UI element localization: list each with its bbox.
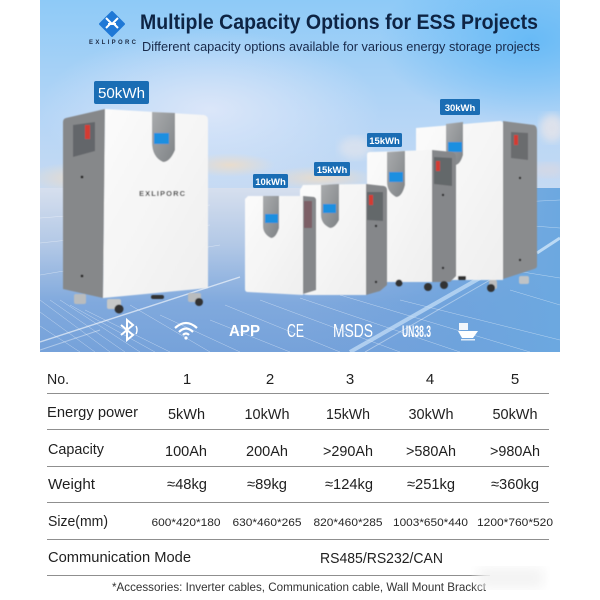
row: Weight: ≈48kg	[167, 476, 207, 493]
label: 30kWh	[440, 99, 480, 115]
row: Communication Mode	[48, 549, 443, 567]
table rules	[47, 394, 549, 576]
battery: 15kWh tall unit	[367, 150, 456, 291]
title: Multiple Capacity Options for ESS Projects	[140, 11, 538, 34]
row: Capacity: 100Ah	[165, 443, 207, 460]
row: Energy power: Energy power	[47, 404, 138, 421]
label: 15kWh wall: 15kWh	[317, 165, 348, 176]
icon: wifi	[175, 323, 197, 340]
label: 15kWh tall	[367, 133, 402, 147]
background: sky and solar panels	[25, 0, 600, 352]
row: Capacity: >580Ah	[406, 443, 456, 460]
row: Weight: ≈89kg	[247, 476, 287, 493]
row: Communication Mode: RS485/RS232/CAN	[320, 550, 443, 567]
subtitle: Different capacity options available for various energy storage projects	[142, 39, 540, 54]
row: Weight: ≈251kg	[407, 476, 455, 493]
row: Weight: ≈124kg	[325, 476, 373, 493]
label: 30kWh: 30kWh	[445, 103, 476, 114]
row: Size(mm)	[48, 513, 553, 530]
row: Weight	[48, 476, 539, 493]
icon: MSDS: MSDS	[333, 321, 373, 341]
table	[47, 371, 553, 576]
row: Weight: ≈360kg	[491, 476, 539, 493]
watermark smudge	[478, 568, 543, 588]
row: No.: 1	[183, 371, 191, 388]
icon: APP: APP	[229, 323, 260, 340]
row: Capacity	[48, 441, 540, 460]
accessories note: *Accessories: Inverter cables, Communication cable, Wall Mount Brackct	[112, 580, 487, 594]
icon: IMDG ship	[458, 323, 478, 340]
row: Energy power: 30kWh	[408, 406, 454, 423]
row: Communication Mode: Communication Mode	[48, 549, 191, 566]
row: Capacity: >290Ah	[323, 443, 373, 460]
row: No.: No.	[47, 371, 69, 388]
label: 10kWh: 10kWh	[255, 177, 286, 188]
row: Energy power: 5kWh	[168, 406, 205, 423]
row: Size(mm): Size(mm)	[48, 513, 108, 530]
row: Size(mm): 630*460*265	[232, 517, 302, 529]
label: 15kWh wall	[314, 162, 350, 176]
row: Size(mm): 820*460*285	[314, 517, 382, 529]
row: Energy power: 10kWh	[244, 406, 290, 423]
row: No.: 3	[346, 371, 354, 388]
row: Energy power	[47, 404, 538, 423]
battery: 50kWh unit	[63, 109, 208, 314]
label: 50kWh: 50kWh	[98, 85, 145, 102]
row: Size(mm): 1200*760*520	[477, 517, 553, 529]
row: Energy power: 15kWh	[326, 406, 370, 423]
row: No.: 2	[266, 371, 274, 388]
row: Size(mm): 600*420*180	[152, 517, 220, 529]
row: No.	[47, 371, 519, 388]
logo: EXLIPORC: EXLIPORC	[89, 40, 137, 46]
row: Size(mm): 1003*650*440	[393, 517, 468, 529]
label: 50kWh	[94, 81, 149, 104]
row: Capacity: 200Ah	[246, 443, 288, 460]
row: No.: 4	[426, 371, 434, 388]
row: No.: 5	[511, 371, 519, 388]
logo: EXLIPORC	[89, 12, 137, 46]
label: 15kWh tall: 15kWh	[369, 136, 400, 147]
row: Weight: Weight	[48, 476, 96, 493]
label: 10kWh	[253, 174, 288, 188]
product wordmark: EXLIPORC	[139, 189, 186, 198]
battery: 15kWh wall unit	[300, 184, 387, 295]
icon: CE mark: CE	[287, 321, 304, 341]
row: Capacity: Capacity	[48, 441, 104, 458]
battery: 30kWh unit	[416, 121, 537, 292]
battery: 10kWh wall unit	[245, 196, 316, 295]
row: Capacity: >980Ah	[490, 443, 540, 460]
icon: UN38.3: UN38.3	[402, 322, 431, 341]
icon: bluetooth	[121, 320, 137, 340]
row: Energy power: 50kWh	[492, 406, 538, 423]
